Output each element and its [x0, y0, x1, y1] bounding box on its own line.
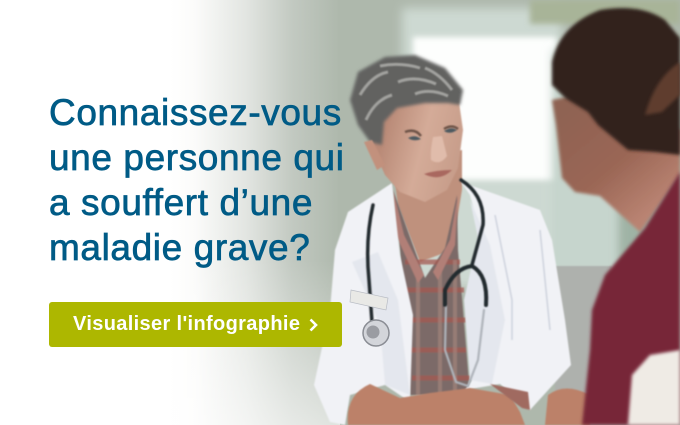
name badge	[350, 290, 388, 310]
neck and chest	[392, 150, 462, 262]
title: Connaissez-vous	[49, 92, 342, 133]
stethoscope	[368, 180, 486, 386]
plaid shirt	[393, 190, 470, 395]
title: maladie grave?	[49, 227, 310, 268]
shirt cuff	[490, 384, 530, 410]
ear	[364, 140, 385, 170]
title: a souffert d’une	[49, 182, 313, 223]
doctor	[314, 55, 571, 425]
stethoscope chestpiece	[363, 320, 389, 346]
icon: chevron arrow	[310, 318, 318, 332]
dark hair	[552, 8, 680, 155]
title	[49, 92, 345, 268]
button: view the infographic	[49, 302, 342, 347]
burgundy top	[582, 172, 680, 425]
cream foreground object	[628, 350, 680, 425]
title: une personne qui	[49, 137, 345, 178]
button: view the infographic: Visualiser l'infographie	[73, 313, 300, 335]
clasped hands	[348, 384, 590, 425]
grey sofa	[555, 266, 612, 400]
face and neck	[552, 90, 680, 232]
white lab coat	[314, 182, 571, 425]
head and face	[372, 92, 463, 202]
patient	[552, 8, 680, 425]
grey hair	[350, 55, 463, 145]
